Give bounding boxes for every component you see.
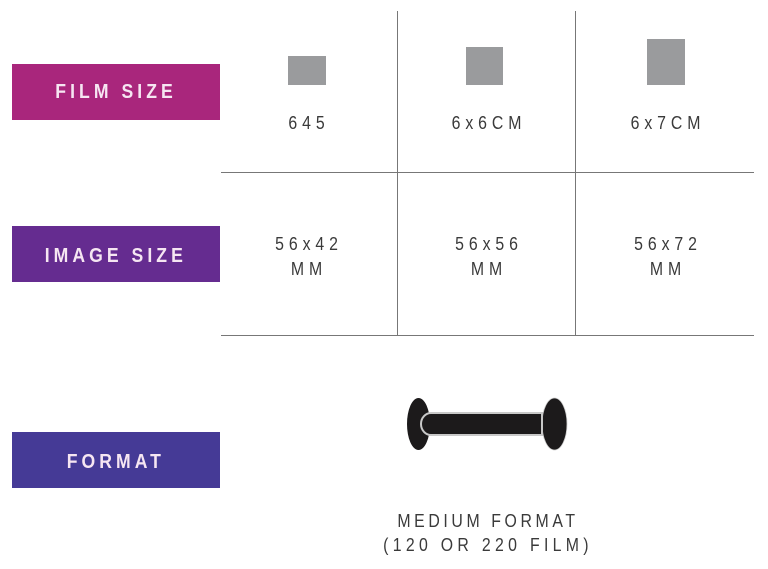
label: film size: FILM SIZE [55, 81, 177, 103]
image size 56x42 mm [275, 234, 343, 279]
label: film size [12, 64, 220, 120]
image size 56x56 mm [455, 234, 523, 279]
image size 56x72 mm: 56x72 [634, 234, 702, 254]
film size 6x6cm: 6x6CM [452, 113, 526, 133]
format caption [383, 511, 593, 555]
image size 56x72 mm [634, 234, 702, 279]
image size 56x56 mm: 56x56 [455, 234, 523, 254]
icon: medium format film spool [407, 398, 568, 450]
image size 56x42 mm: 56x42 [275, 234, 343, 254]
image size 56x42 mm: MM [291, 259, 327, 279]
image size 56x72 mm: MM [650, 259, 686, 279]
icon: 6x6 film square [466, 47, 503, 85]
icon: 6x7 film square [647, 39, 685, 85]
format caption: MEDIUM FORMAT [397, 511, 579, 531]
film size 645: 645 [288, 113, 330, 133]
film size 6x7cm: 6x7CM [631, 113, 705, 133]
image size 56x56 mm: MM [471, 259, 507, 279]
label: image size: IMAGE SIZE [45, 245, 187, 267]
label: image size [12, 226, 220, 282]
icon: 645 film square [288, 56, 326, 85]
format caption: (120 OR 220 FILM) [383, 535, 593, 555]
label: format: FORMAT [67, 451, 165, 473]
label: format [12, 432, 220, 488]
